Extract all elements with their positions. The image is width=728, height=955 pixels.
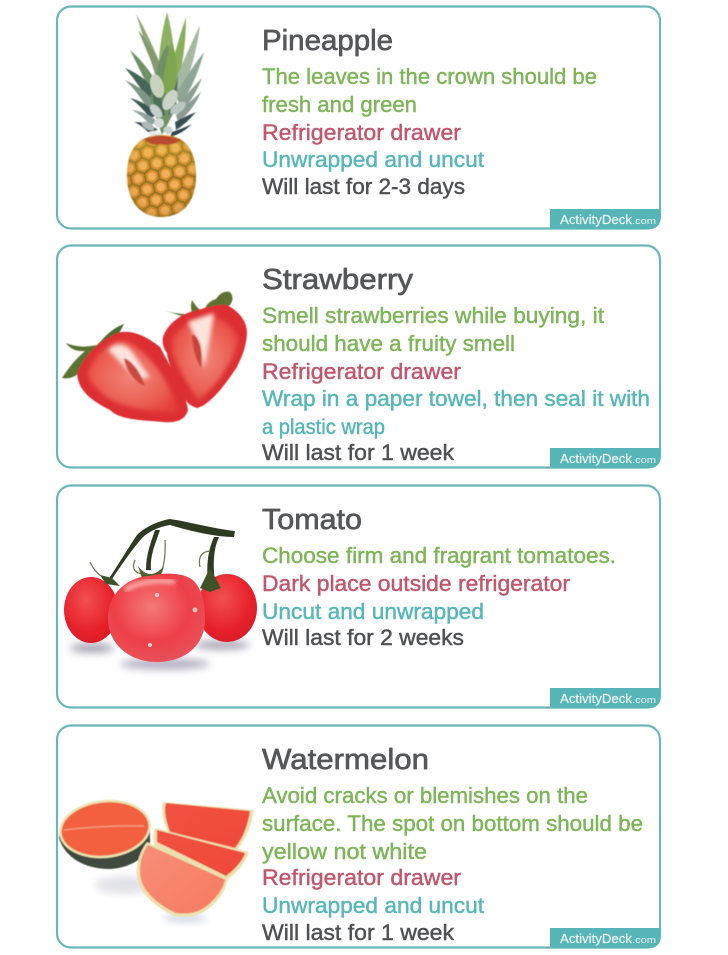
text: wrapping: Unwrapped and uncut <box>262 893 485 918</box>
badge: ActivityDeck.com: ActivityDeck <box>560 213 633 227</box>
text: wrapping <box>262 386 650 439</box>
text: storage place: Refrigerator drawer <box>262 120 462 145</box>
text: storage place: Refrigerator drawer <box>262 865 462 890</box>
text: wrapping: Uncut and unwrapped <box>262 599 484 624</box>
badge: ActivityDeck.com: .com <box>632 455 656 465</box>
icon: watermelon <box>56 795 254 921</box>
text: selection tip: Avoid cracks or blemishes on the <box>262 783 588 808</box>
badge: ActivityDeck.com <box>550 688 661 708</box>
icon: tomato <box>64 519 257 670</box>
badge: ActivityDeck.com <box>550 448 661 468</box>
panel: strawberry <box>57 246 661 468</box>
text: selection tip <box>262 64 597 117</box>
text: wrapping: Unwrapped and uncut <box>262 147 485 172</box>
text: shelf life: Will last for 1 week <box>262 920 455 945</box>
text: shelf life: Will last for 1 week <box>262 440 455 465</box>
badge: ActivityDeck.com: ActivityDeck <box>560 452 633 466</box>
title: Strawberry: Strawberry <box>262 264 414 296</box>
title: Tomato: Tomato <box>262 504 362 536</box>
badge: ActivityDeck.com: .com <box>632 695 656 705</box>
panel: tomato <box>57 486 661 708</box>
icon: strawberry <box>62 292 247 422</box>
panel: pineapple <box>57 6 661 230</box>
text: selection tip: Choose firm and fragrant tomatoes. <box>262 543 616 568</box>
text: shelf life: Will last for 2-3 days <box>262 174 465 199</box>
badge: ActivityDeck.com <box>550 209 661 230</box>
text: selection tip: Smell strawberries while buying, it <box>262 303 605 328</box>
text: selection tip: fresh and green <box>262 92 417 117</box>
text: selection tip: surface. The spot on bottom should be <box>262 811 643 836</box>
text: selection tip <box>262 303 605 356</box>
title: Pineapple: Pineapple <box>262 25 393 57</box>
text: selection tip: The leaves in the crown should be <box>262 64 597 89</box>
icon: pineapple <box>125 12 204 217</box>
panel: watermelon <box>56 726 661 948</box>
badge: ActivityDeck.com: .com <box>632 935 656 945</box>
text: shelf life: Will last for 2 weeks <box>262 625 464 650</box>
badge: ActivityDeck.com: ActivityDeck <box>560 692 633 706</box>
text: storage place: Dark place outside refrigerator <box>262 571 571 596</box>
text: selection tip: should have a fruity smell <box>262 331 515 356</box>
text: wrapping: Wrap in a paper towel, then seal it with <box>262 386 650 411</box>
text: selection tip: yellow not white <box>262 839 427 864</box>
badge: ActivityDeck.com: .com <box>632 216 656 226</box>
badge: ActivityDeck.com <box>550 928 661 948</box>
text: storage place: Refrigerator drawer <box>262 359 462 384</box>
text: selection tip <box>262 783 643 864</box>
title: Watermelon: Watermelon <box>262 744 429 776</box>
badge: ActivityDeck.com: ActivityDeck <box>560 932 633 946</box>
text: wrapping: a plastic wrap <box>262 416 385 439</box>
